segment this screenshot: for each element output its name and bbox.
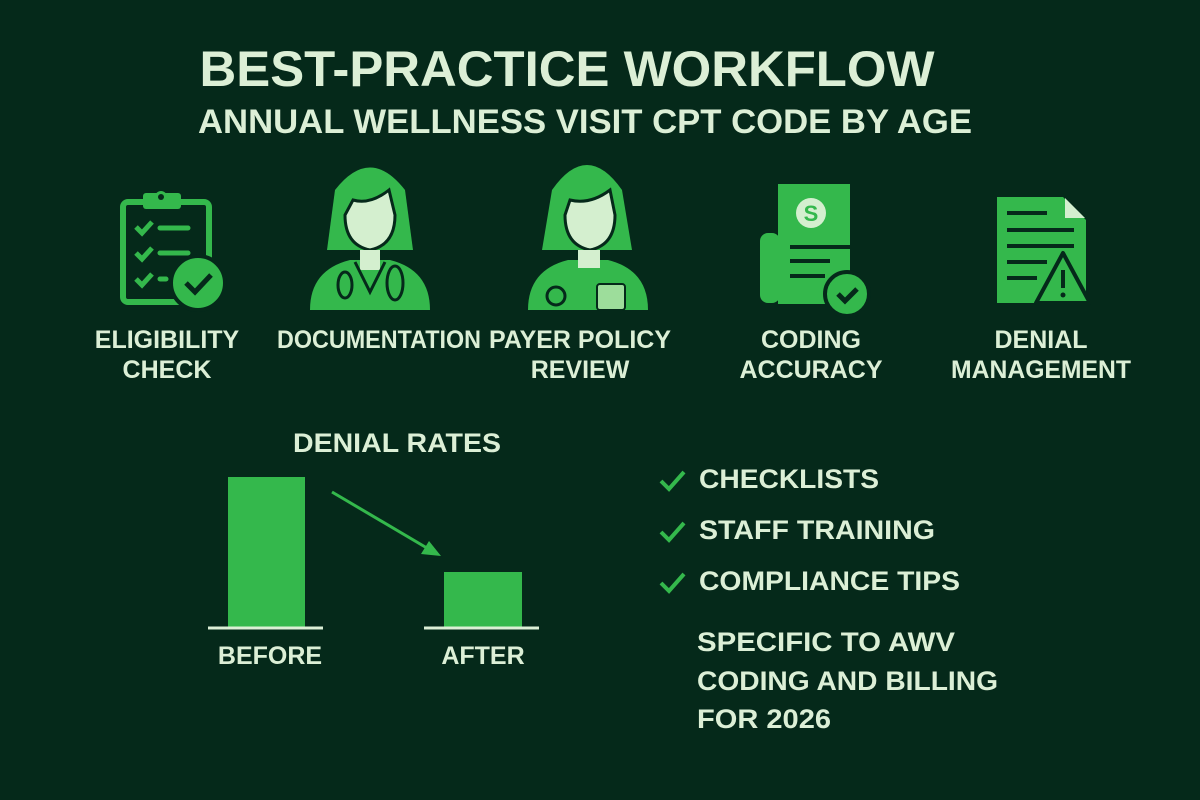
bar: after xyxy=(444,572,522,627)
arrow xyxy=(332,492,441,556)
note text: SPECIFIC TO AWV xyxy=(697,627,955,657)
chart: denial rates: AFTER xyxy=(441,642,525,670)
step: eligibility check: CHECK xyxy=(123,356,211,384)
note text xyxy=(697,627,998,734)
step: coding accuracy: CODING xyxy=(761,326,861,354)
subtitle: ANNUAL WELLNESS VISIT CPT CODE BY AGE xyxy=(198,103,972,141)
step: payer policy review: PAYER POLICY xyxy=(489,326,671,354)
checklist: COMPLIANCE TIPS xyxy=(699,566,960,596)
step: eligibility check: ELIGIBILITY xyxy=(95,326,240,354)
icon: invoice: S xyxy=(804,201,818,226)
step: documentation: DOCUMENTATION xyxy=(277,326,481,354)
title: BEST-PRACTICE WORKFLOW xyxy=(200,41,935,97)
icon: invoice xyxy=(760,184,869,316)
step: payer policy review xyxy=(489,165,671,384)
chart: denial rates xyxy=(208,428,539,670)
checklist xyxy=(661,464,960,596)
step: denial management xyxy=(951,197,1131,384)
note text: FOR 2026 xyxy=(697,704,831,734)
step: coding accuracy xyxy=(739,184,883,384)
checklist: CHECKLISTS xyxy=(699,464,879,494)
chart: denial rates: DENIAL RATES xyxy=(293,428,501,458)
icon: clinician with badge xyxy=(528,165,648,310)
step: payer policy review: REVIEW xyxy=(531,356,630,384)
icon: document warning xyxy=(997,197,1090,303)
chart: denial rates: BEFORE xyxy=(218,642,322,670)
bar: before xyxy=(228,477,305,627)
step: eligibility check xyxy=(95,191,240,384)
note text: CODING AND BILLING xyxy=(697,666,998,696)
step: denial management: MANAGEMENT xyxy=(951,356,1131,384)
icon: clipboard xyxy=(123,191,225,310)
checklist: STAFF TRAINING xyxy=(699,515,935,545)
step: denial management: DENIAL xyxy=(994,326,1088,354)
step: documentation xyxy=(277,168,481,354)
step: coding accuracy: ACCURACY xyxy=(739,356,883,384)
icon: clinician xyxy=(310,168,430,310)
